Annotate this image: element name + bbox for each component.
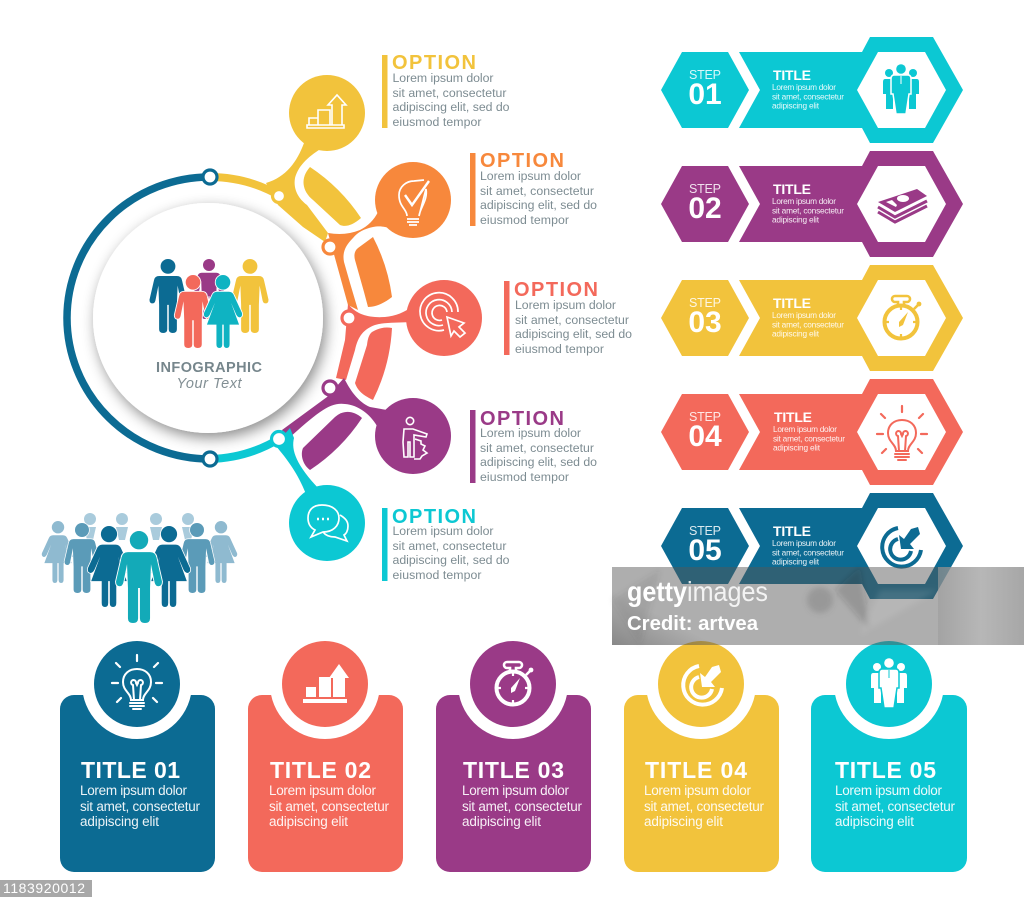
panel: central hub diagram xyxy=(67,75,482,561)
panel: step 01: sit amet, consectetur xyxy=(772,92,844,102)
panel: option 1 text: adipiscing elit, sed do xyxy=(392,100,510,114)
panel: option 3 text: Lorem ipsum dolor xyxy=(515,298,616,312)
panel: card title 01: TITLE 01 xyxy=(81,757,180,783)
panel: card title 03 xyxy=(436,629,591,872)
icon: stopwatch xyxy=(884,296,921,338)
panel: step 05 xyxy=(661,493,963,599)
panel: step 02: TITLE xyxy=(773,181,811,197)
panel: option 2 text: adipiscing elit, sed do xyxy=(480,198,597,212)
icon: stopwatch xyxy=(496,662,533,704)
panel: step 05: 05 xyxy=(688,534,722,567)
panel: step 01: 01 xyxy=(688,78,722,111)
panel: card title 03: TITLE 03 xyxy=(463,757,564,783)
icon: target xyxy=(882,527,921,567)
panel: step 02: adipiscing elit xyxy=(772,214,820,224)
panel: option 5 text: adipiscing elit, sed do xyxy=(392,553,510,567)
icon: team xyxy=(871,658,907,708)
panel: step 03: adipiscing elit xyxy=(772,328,820,338)
panel: step 04: adipiscing elit xyxy=(773,442,821,452)
branch: cyan xyxy=(210,428,365,561)
panel: step 02: STEP xyxy=(689,182,721,196)
panel: option 4 text xyxy=(470,408,597,484)
panel: step 01: STEP xyxy=(689,68,721,82)
panel: step 02: Lorem ipsum dolor xyxy=(772,196,836,206)
text: your text: Your Text xyxy=(176,376,242,392)
panel: step 03: STEP xyxy=(689,296,721,310)
panel: step 03: TITLE xyxy=(773,295,811,311)
watermark: getty images band: gettyimages xyxy=(627,576,768,607)
branch: purple xyxy=(282,378,451,474)
icon: light bulb xyxy=(112,655,162,709)
panel: step 03: Lorem ipsum dolor xyxy=(772,310,836,320)
panel: card title 01: sit amet, consectetur xyxy=(80,799,200,814)
panel: card title 05: Lorem ipsum dolor xyxy=(835,783,942,798)
panel: option 2 text xyxy=(470,150,597,227)
icon: target xyxy=(683,665,722,705)
panel: card title 04: Lorem ipsum dolor xyxy=(644,783,752,798)
panel: step 05: adipiscing elit xyxy=(772,556,820,566)
branch: yellow xyxy=(210,75,365,242)
panel: card title 02 xyxy=(248,629,403,872)
panel: option 4 text: OPTION xyxy=(480,408,564,430)
panel: step 03 xyxy=(661,265,963,371)
panel: option 1 text: Lorem ipsum dolor xyxy=(392,71,494,85)
panel: card title 02: adipiscing elit xyxy=(269,814,348,829)
panel: step 03: 03 xyxy=(688,306,722,339)
panel: option 1 text: eiusmod tempor xyxy=(392,115,482,129)
panel: option 3 text xyxy=(504,279,632,356)
watermark: getty images band: Credit: artvea xyxy=(627,613,759,635)
branch: orange xyxy=(328,162,451,310)
panel: step 04: sit amet, consectetur xyxy=(773,434,845,444)
panel: card title 04 xyxy=(624,629,779,872)
panel: option 5 text: OPTION xyxy=(392,506,476,528)
panel: option 2 text: sit amet, consectetur xyxy=(480,184,594,198)
panel: option 1 text: OPTION xyxy=(392,52,476,74)
panel: card title 03: Lorem ipsum dolor xyxy=(462,783,570,798)
panel: card title 01 xyxy=(60,629,215,872)
icon: central people group xyxy=(150,259,268,348)
panel: card title 03: sit amet, consectetur xyxy=(462,799,582,814)
panel: option 3 text: OPTION xyxy=(514,279,598,301)
panel: card title 04: sit amet, consectetur xyxy=(644,799,764,814)
panel: step 01: Lorem ipsum dolor xyxy=(772,82,836,92)
panel: option 4 text: adipiscing elit, sed do xyxy=(480,455,597,469)
panel: card title 05: TITLE 05 xyxy=(835,757,936,783)
panel: step 05: STEP xyxy=(689,524,721,538)
panel: step 05: sit amet, consectetur xyxy=(772,548,844,558)
branch: coral xyxy=(336,280,482,380)
icon: bulb with check xyxy=(399,180,429,225)
band segments xyxy=(302,167,392,470)
panel: step 03: sit amet, consectetur xyxy=(772,320,844,330)
panel: card title 01: adipiscing elit xyxy=(80,814,159,829)
panel: step 01 xyxy=(661,37,963,143)
panel: step 05: Lorem ipsum dolor xyxy=(772,538,836,548)
panel: card title 02: sit amet, consectetur xyxy=(269,799,390,814)
panel: option 5 text: eiusmod tempor xyxy=(392,568,482,582)
icon: growth chart xyxy=(303,664,349,703)
panel: step 04: TITLE xyxy=(774,409,812,425)
panel: option 2 text: eiusmod tempor xyxy=(480,213,569,227)
panel: step 04: STEP xyxy=(689,410,721,424)
image id label: 1183920012 xyxy=(3,880,85,896)
panel: option 1 text xyxy=(382,52,510,129)
watermark: getty images band xyxy=(612,567,1024,645)
centre disc with shadow xyxy=(93,203,323,433)
panel: step 05: TITLE xyxy=(773,523,811,539)
panel: option 3 text: sit amet, consectetur xyxy=(515,313,629,327)
ring: blue left arc xyxy=(67,177,210,459)
icon: target cursor xyxy=(420,293,465,337)
panel: card title 04: adipiscing elit xyxy=(644,814,723,829)
panel: step 02: sit amet, consectetur xyxy=(772,206,844,216)
icon: light bulb xyxy=(877,406,927,460)
panel: step 04 xyxy=(661,379,963,485)
panel: card title 05 xyxy=(811,629,967,872)
panel: option 5 text xyxy=(382,506,510,582)
panel: card title 05: adipiscing elit xyxy=(835,814,914,829)
panel: option 4 text: eiusmod tempor xyxy=(480,470,569,484)
panel: step 01: adipiscing elit xyxy=(772,100,820,110)
icon: crowd of people xyxy=(42,513,237,623)
icon: chat bubbles xyxy=(308,505,348,541)
panel: card title 04: TITLE 04 xyxy=(645,757,747,783)
panel: card title 01: Lorem ipsum dolor xyxy=(80,783,188,798)
icon: growth chart line xyxy=(307,95,346,128)
icon: stack of money xyxy=(878,189,927,222)
node markers xyxy=(203,170,356,466)
panel: option 2 text: Lorem ipsum dolor xyxy=(480,169,581,183)
panel: card title 02: TITLE 02 xyxy=(270,757,371,783)
panel: option 4 text: Lorem ipsum dolor xyxy=(480,426,581,440)
panel: step 01: TITLE xyxy=(773,67,811,83)
heading: infographic: INFOGRAPHIC xyxy=(156,360,263,376)
panel: card title 03: adipiscing elit xyxy=(462,814,541,829)
icon: team xyxy=(883,64,919,114)
panel: step 02 xyxy=(661,151,963,257)
panel: option 1 text: sit amet, consectetur xyxy=(392,86,506,100)
panel: option 4 text: sit amet, consectetur xyxy=(480,441,594,455)
panel: step 02: 02 xyxy=(688,192,722,225)
icon: person with gear xyxy=(403,417,427,459)
panel: option 3 text: adipiscing elit, sed do xyxy=(515,327,632,341)
panel: card title 05: sit amet, consectetur xyxy=(835,799,956,814)
panel: option 3 text: eiusmod tempor xyxy=(515,342,604,356)
panel: option 5 text: sit amet, consectetur xyxy=(392,539,506,553)
panel: option 2 text: OPTION xyxy=(480,150,564,172)
panel: step 04: 04 xyxy=(688,420,722,453)
panel: option 5 text: Lorem ipsum dolor xyxy=(392,524,494,538)
panel: step 04: Lorem ipsum dolor xyxy=(773,424,837,434)
panel: card title 02: Lorem ipsum dolor xyxy=(269,783,376,798)
